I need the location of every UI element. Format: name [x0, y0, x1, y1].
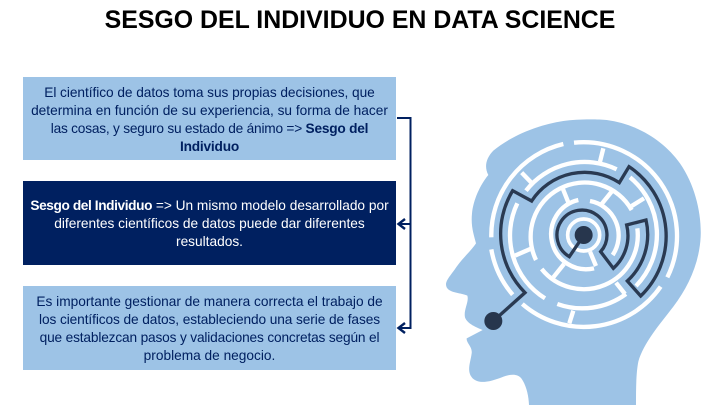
- panel: managing the work: [23, 286, 396, 370]
- panel: individual decisions: [23, 77, 396, 160]
- panel: managing the work: Es importante gestionar de manera correcta el trabajo de: [36, 294, 383, 309]
- maze path: [493, 167, 666, 321]
- panel: individual bias definition: Sesgo del Individuo => Un mismo modelo desarrollado por: [30, 198, 389, 213]
- panel: managing the work: los científicos de datos, estableciendo una serie de fases: [39, 312, 380, 327]
- panel: individual decisions: determina en función de su experiencia, su forma de hacer: [31, 103, 388, 118]
- panel: managing the work: problema de negocio.: [144, 348, 275, 363]
- head silhouette: [446, 119, 701, 405]
- panel: individual bias definition: resultados.: [176, 234, 243, 249]
- panel: individual bias definition: diferentes científicos de datos puede dar diferentes: [54, 216, 365, 231]
- panel: individual decisions: El científico de datos toma sus propias decisiones, que: [44, 85, 375, 100]
- panel: managing the work: que establezcan pasos y validaciones concretas según el: [40, 330, 379, 345]
- maze walls: [491, 142, 677, 327]
- panel: individual decisions: Individuo: [180, 139, 239, 154]
- maze entry node: [484, 312, 502, 330]
- maze centre node: [575, 226, 593, 244]
- title: SESGO DEL INDIVIDUO EN DATA SCIENCE: [105, 6, 615, 34]
- panel: individual bias definition: [23, 181, 396, 265]
- panel: individual decisions: las cosas, y seguro su estado de ánimo => Sesgo del: [51, 121, 368, 136]
